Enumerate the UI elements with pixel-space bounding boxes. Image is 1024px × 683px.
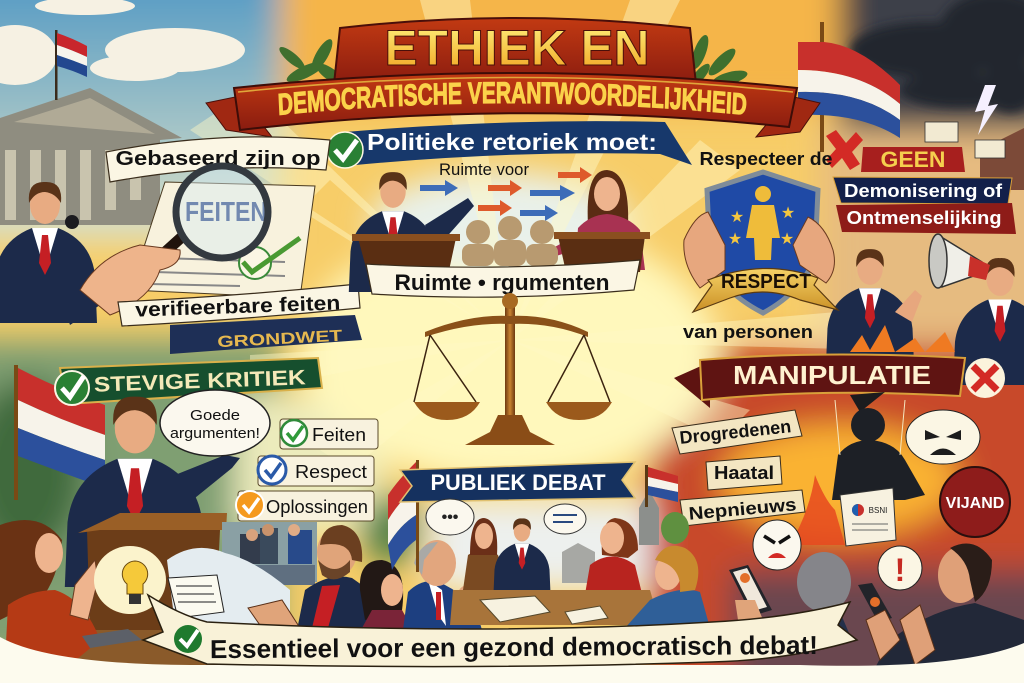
speaker arm bbox=[175, 455, 240, 502]
ribbon: gebaseerd zijn op: Gebaseerd zijn op bbox=[116, 148, 320, 170]
storm clouds, top right bbox=[850, 0, 1024, 113]
magnifier bbox=[152, 166, 268, 265]
speech bubble, dots bbox=[426, 499, 474, 535]
chip: oplossingen bbox=[236, 491, 374, 521]
banner bbox=[55, 358, 322, 405]
blonde woman bbox=[625, 546, 710, 628]
shield: ★ bbox=[730, 209, 744, 226]
banner: ontmenselijking bbox=[836, 203, 1016, 234]
scales of justice bbox=[414, 293, 612, 445]
badge: vijand bbox=[940, 467, 1010, 537]
banner: ontmenselijking: Ontmenselijking bbox=[846, 208, 1002, 228]
book: grondwet bbox=[170, 315, 362, 354]
clapping woman bbox=[0, 520, 100, 665]
dark haired woman bbox=[360, 560, 412, 628]
ribbon: ruimte argumenten: Ruimte • rgumenten bbox=[394, 270, 610, 295]
shouting man bbox=[866, 544, 1024, 668]
bottom paper edge bbox=[0, 637, 1024, 683]
speaker, woman bbox=[553, 170, 645, 270]
speaker left bbox=[0, 182, 100, 325]
audience, bottom left bbox=[0, 520, 486, 665]
back row scene bbox=[222, 522, 317, 585]
gray haired woman bbox=[797, 552, 852, 640]
shield: ★ bbox=[780, 231, 794, 248]
label: respecteer de: Respecteer de bbox=[700, 149, 832, 169]
bald man bbox=[403, 540, 486, 630]
table, left bbox=[70, 630, 240, 665]
badge: vijand: VIJAND bbox=[946, 495, 1004, 512]
speech bubble: Goede bbox=[190, 407, 240, 424]
tag: haatal bbox=[706, 456, 782, 490]
emoji bubble bbox=[753, 520, 801, 570]
speech bubble: argumenten! bbox=[170, 425, 260, 442]
banner: STEVIGE KRITIEK bbox=[93, 366, 306, 397]
speech bubble bbox=[160, 390, 270, 456]
speech bubble, lines bbox=[544, 504, 586, 534]
flames bbox=[850, 325, 955, 352]
ribbon: verifieerbare feiten bbox=[118, 284, 360, 326]
tag: nepnieuws bbox=[680, 490, 805, 526]
document held by puppeteer: BSNI bbox=[869, 506, 887, 515]
ribbon: ruimte argumenten bbox=[366, 260, 640, 297]
light bulb bbox=[94, 546, 166, 614]
panellists bbox=[463, 518, 646, 612]
chip: oplossingen: Oplossingen bbox=[266, 497, 368, 517]
lecterns bbox=[352, 232, 650, 275]
ribbon: respect bbox=[693, 268, 838, 312]
clouds, top left bbox=[0, 0, 245, 85]
label: van personen: van personen bbox=[683, 322, 813, 342]
banner: geen: GEEN bbox=[880, 147, 946, 172]
title: ETHIEK EN bbox=[384, 20, 650, 76]
banner: manipulatie: MANIPULATIE bbox=[733, 360, 931, 390]
hand bbox=[80, 245, 180, 315]
chip: respect bbox=[258, 456, 374, 486]
megaphone bbox=[929, 234, 990, 288]
tag: drogredenen bbox=[672, 410, 802, 454]
flames behind the puppeteer bbox=[790, 475, 845, 545]
panel: geen demonisering bbox=[826, 147, 1024, 385]
people with phones, bottom right bbox=[729, 520, 1024, 668]
man with megaphone bbox=[953, 258, 1024, 385]
book: grondwet: GRONDWET bbox=[217, 328, 343, 351]
flag top right bbox=[798, 22, 900, 152]
book on table bbox=[82, 629, 142, 648]
banner bbox=[400, 462, 635, 502]
bottom banner bbox=[143, 595, 857, 667]
panel: feiten bbox=[0, 137, 362, 354]
speech bubble, dots: ••• bbox=[442, 509, 459, 526]
title bbox=[205, 17, 821, 138]
ribbon: verifieerbare feiten: verifieerbare feiten bbox=[135, 292, 341, 322]
subheading: politieke retoriek: Politieke retoriek moet: bbox=[367, 129, 657, 155]
exclamation bubble: ! bbox=[895, 552, 905, 588]
subheading: politieke retoriek bbox=[327, 121, 692, 168]
label: ruimte voor: Ruimte voor bbox=[439, 160, 529, 179]
shield: ★ bbox=[781, 205, 795, 222]
banner: PUBLIEK DEBAT bbox=[430, 470, 606, 495]
bottom banner: Essentieel voor een gezond democratisch debat! bbox=[210, 630, 818, 664]
shield: ★ bbox=[728, 231, 742, 248]
speaker, man bbox=[349, 172, 474, 292]
document held by puppeteer bbox=[840, 488, 896, 546]
panel: publiek debat bbox=[388, 460, 710, 628]
paper cloud bbox=[167, 548, 290, 625]
bearded man bbox=[248, 525, 378, 630]
papers on the table bbox=[480, 596, 608, 624]
lectern bbox=[78, 513, 227, 630]
parliament building bbox=[0, 88, 182, 225]
tag: drogredenen: Drogredenen bbox=[679, 416, 792, 448]
phone, right bbox=[858, 583, 892, 622]
angry man bbox=[826, 249, 922, 369]
arrows bbox=[420, 167, 592, 221]
flag right bbox=[645, 465, 678, 507]
laurel leaves bbox=[277, 33, 749, 89]
ribbon: gebaseerd zijn op bbox=[106, 137, 330, 182]
hands on shield bbox=[684, 212, 834, 288]
flag top left bbox=[55, 30, 87, 100]
panel: stevige kritiek bbox=[14, 358, 378, 630]
lightning bbox=[975, 85, 998, 135]
tag: haatal: Haatal bbox=[714, 463, 774, 483]
banner: manipulatie bbox=[674, 354, 965, 408]
chip: feiten bbox=[280, 419, 378, 449]
town buildings and papers, top right bbox=[925, 122, 1024, 190]
shield bbox=[707, 172, 818, 313]
panel: respect bbox=[683, 130, 863, 342]
document bbox=[130, 182, 315, 298]
ribbon: respect: RESPECT bbox=[721, 271, 811, 293]
banner: demonisering of: Demonisering of bbox=[844, 181, 1003, 201]
flag left bbox=[388, 460, 419, 572]
title: DEMOCRATISCHE VERANTWOORDELIJKHEID bbox=[278, 82, 746, 116]
icon: red cross bbox=[965, 358, 1005, 398]
tag: nepnieuws: Nepnieuws bbox=[688, 494, 797, 524]
phone, left bbox=[729, 565, 772, 625]
chip: feiten: Feiten bbox=[312, 425, 366, 445]
flag bbox=[14, 365, 105, 500]
document: FEITEN bbox=[185, 196, 267, 227]
puppeteer bbox=[832, 392, 925, 500]
audience silhouettes bbox=[462, 216, 558, 266]
check mark on document bbox=[239, 238, 300, 279]
bubble: angry face bbox=[906, 410, 980, 464]
church and house bbox=[562, 490, 689, 583]
speaker bbox=[65, 397, 205, 587]
red cross bbox=[826, 130, 863, 170]
exclamation bubble bbox=[878, 546, 922, 590]
table bbox=[450, 590, 660, 625]
panel: ruimte voor argumenten bbox=[349, 160, 650, 297]
banner: demonisering of bbox=[833, 177, 1012, 204]
banner: geen bbox=[861, 147, 965, 172]
chip: respect: Respect bbox=[295, 462, 367, 482]
